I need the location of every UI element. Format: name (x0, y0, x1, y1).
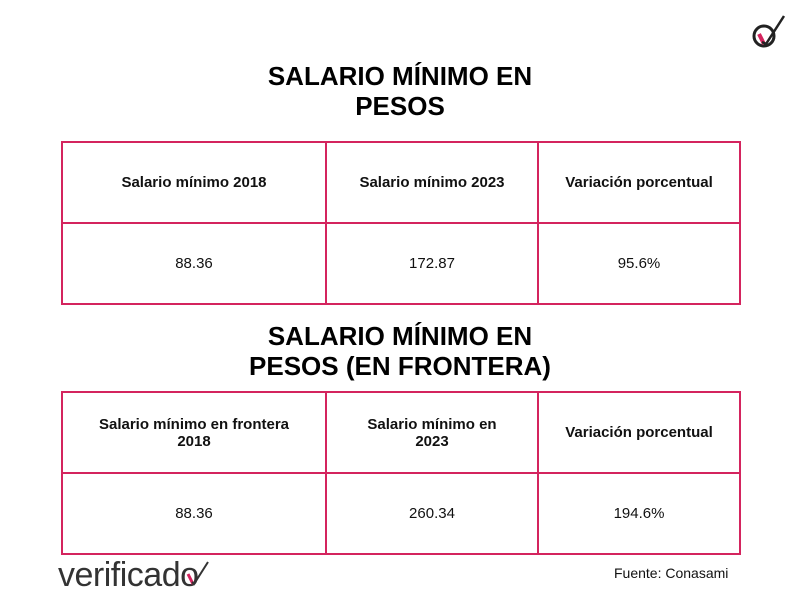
table 2: 194.6% (614, 505, 664, 522)
title 1: SALARIO MÍNIMO EN (268, 61, 532, 91)
title 2: PESOS (EN FRONTERA) (249, 351, 551, 381)
title 1 (268, 61, 532, 121)
table 1 (61, 141, 741, 305)
table 2: Salario mínimo en frontera (99, 416, 289, 432)
table 2: 88.36 (175, 505, 213, 522)
table 2: 2018 (177, 432, 211, 450)
table 2: 260.34 (409, 505, 455, 522)
table 2: Salario mínimo en (367, 416, 497, 432)
title 2: SALARIO MÍNIMO EN (268, 321, 532, 351)
title 2 (249, 321, 551, 381)
logo: verificado: verificado (58, 556, 199, 594)
table 1: 88.36 (175, 255, 213, 272)
icon: check logo (752, 15, 785, 48)
source: Fuente: Conasami (614, 565, 728, 581)
table 1: Salario mínimo 2018 (121, 174, 267, 191)
table 1: Variación porcentual (565, 174, 713, 191)
table 2 (61, 391, 741, 555)
title 1: PESOS (355, 91, 445, 121)
table 1: 95.6% (618, 255, 660, 272)
table 1: 172.87 (409, 255, 455, 272)
table 2: Variación porcentual (565, 424, 713, 441)
table 2: 2023 (415, 432, 449, 450)
table 1: Salario mínimo 2023 (359, 174, 505, 191)
